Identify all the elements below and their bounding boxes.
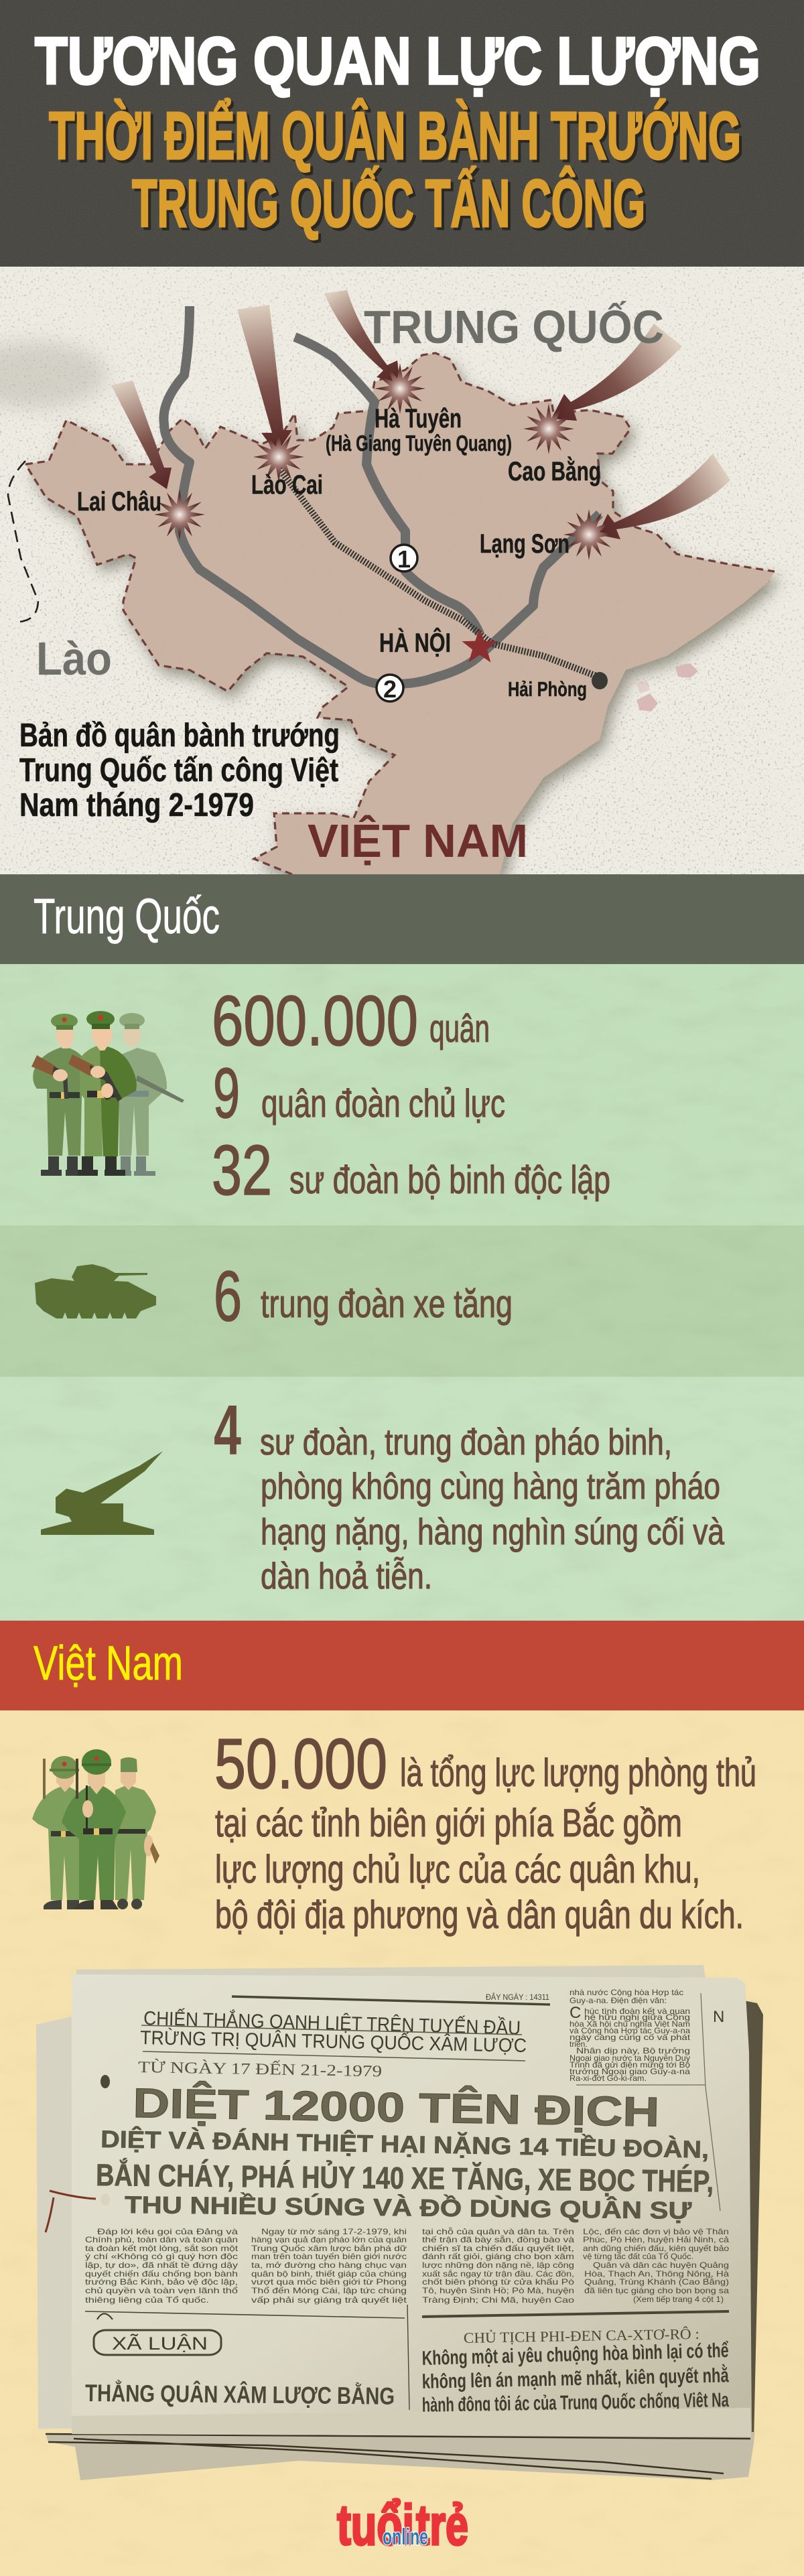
stat: 32 divisions: 32 — [212, 1131, 272, 1210]
newspaper: article column 2: ta, mở đường cho hàng chục vạn — [251, 2260, 407, 2270]
newspaper: back sheets — [36, 1965, 763, 2480]
icon: tank — [35, 1264, 156, 1319]
map label: TRUNG QUOC: TRUNG QUỐC — [364, 300, 664, 353]
map label: Lao Cai: Lào Cai — [251, 470, 323, 500]
stat: 600.000 troops: 600.000 — [212, 981, 418, 1061]
newspaper: article column 1: chủ quyền và toàn vẹn lãnh thổ — [85, 2286, 238, 2295]
stat: 9 corps — [213, 1054, 505, 1133]
icon: burst Cao Bang — [523, 403, 574, 454]
newspaper: article column 1: thiêng liêng của Tổ quốc. — [85, 2295, 209, 2305]
header panel — [0, 0, 804, 267]
map: western border dashed — [25, 464, 395, 874]
newspaper: side column box: ngày càng củng cố và phát — [570, 2033, 691, 2042]
newspaper: side column box — [570, 1988, 691, 2083]
newspaper: article column 4: Lộc, đến các đơn vị bảo vệ Thân — [583, 2227, 729, 2236]
map: attack arrow Lai Chau — [111, 381, 172, 489]
newspaper: article column 2: man trên toàn tuyến biên giới nước — [251, 2252, 407, 2261]
newspaper: article column 3: chốt biên phòng từ cửa khẩu Pò — [422, 2277, 574, 2287]
icon: burst Lai Chau — [154, 489, 205, 540]
map: islands — [636, 663, 698, 711]
newspaper: article column 3 — [422, 2226, 574, 2305]
panel: China troops — [0, 964, 804, 1225]
stat: 4 artillery divisions: dàn hoả tiễn. — [261, 1555, 432, 1597]
map label: Ha Tuyen: Hà Tuyên — [375, 404, 462, 433]
stat: 4 artillery divisions: 4 — [214, 1391, 241, 1470]
newspaper: article column 3: xuất sắc ngay từ trận đầu. Các đồn, — [422, 2268, 574, 2279]
map caption: Nam tháng 2-1979 — [19, 787, 254, 823]
stat: 50.000 defenders: tại các tỉnh biên giới phía Bắc gồm — [215, 1802, 682, 1845]
map caption: Trung Quốc tấn công Việt — [19, 752, 338, 789]
newspaper: article column 1: trướng Bắc Kinh, bảo vệ độc lập, — [85, 2277, 238, 2287]
newspaper: article column 4 — [583, 2227, 729, 2304]
newspaper: drop cap column: N — [713, 2008, 724, 2026]
newspaper: date line: TỪ NGÀY 17 ĐẾN 21-2-1979 — [138, 2058, 382, 2080]
newspaper: article column 1: lập, tự do», đã nhất tề đứng dậy — [85, 2260, 238, 2270]
newspaper: side column box: hòa Xã hội chủ nghĩa Việt Nam — [570, 2019, 690, 2029]
stat: 4 artillery divisions — [214, 1391, 724, 1597]
newspaper: front sheet — [72, 1974, 752, 2437]
newspaper: article column 3: Tô, huyện Sình Hồ; Pò Mà, huyện — [422, 2286, 574, 2295]
newspaper: article column 2: quân bộ binh, thiết giáp của chúng — [251, 2269, 407, 2279]
newspaper: article column 2: Trung Quốc xâm lược bắn phá dữ — [251, 2243, 407, 2253]
newspaper: horizontal rules and divider — [85, 2305, 729, 2410]
newspaper: article column 4: Quảng, Trùng Khánh (Cao Bằng) — [584, 2277, 729, 2287]
map: northern border dashed — [25, 353, 775, 571]
icon: Hanoi star — [462, 628, 498, 663]
centre soldier — [62, 1749, 126, 1909]
section band: Viet Nam — [0, 1621, 804, 1710]
newspaper: subhead 1: DIỆT VÀ ĐÁNH THIỆT HẠI NẶNG 14 TIỀU ĐOÀN, — [100, 2124, 709, 2163]
newspaper: editorial headline: THẲNG QUÂN XÂM LƯỢC BẰNG — [85, 2378, 395, 2410]
logo: Tuoi Tre Online: tuổi — [337, 2494, 414, 2557]
map label: Cao Bang: Cao Bằng — [508, 456, 601, 486]
newspaper: article column 4: (Xem tiếp trang 4 cột 1) — [633, 2295, 724, 2304]
newspaper: article column 3: tại chỗ của quân và dân ta. Trên — [422, 2226, 574, 2236]
newspaper: subhead 3: THU NHIỀU SÚNG VÀ ĐỒ DÙNG QUÂN SỰ — [125, 2190, 691, 2224]
map: attack arrow Cao Bang — [551, 324, 682, 421]
stat: 600.000 troops: quân — [429, 1007, 490, 1050]
icon: rocket launcher — [41, 1451, 163, 1535]
icon: burst Lao Cai — [253, 431, 304, 482]
newspaper: article column 4: đã liên tục giáng cho bọn bọng sa — [584, 2286, 729, 2295]
newspaper: side column box: Nhân dịp này, Bộ trưởng — [576, 2046, 690, 2055]
newspaper: column rules — [576, 1993, 720, 2211]
section band: Trung Quoc: Trung Quốc — [34, 888, 220, 944]
map: land mass of Vietnam — [25, 353, 775, 874]
newspaper: side column box: C — [570, 2004, 581, 2022]
newspaper: article column 3: đánh rất giỏi, giáng cho bọn xâm — [422, 2252, 574, 2261]
newspaper: side column box: nhà nước Cộng hòa Hợp tác — [570, 1988, 683, 1997]
newspaper: article column 1: quyết chiến đấu chống bọn bành — [85, 2269, 238, 2279]
centre soldier — [68, 1011, 137, 1176]
left soldier — [32, 1756, 83, 1909]
icon: Vietnamese soldiers — [32, 1749, 159, 1909]
map caption: Bản đồ quân bành trướng — [19, 718, 340, 754]
section band: Trung Quoc — [0, 874, 804, 964]
newspaper: article column 1: Đáp lời kêu gọi của Đảng và — [97, 2227, 238, 2236]
map: attack arrow Lao Cai — [237, 305, 292, 454]
map: attack arrow Lang Son — [598, 454, 730, 539]
newspaper: article column 1: ta đoàn kết một lòng, sắt son một — [85, 2243, 239, 2253]
newspaper: article column 3: thế trận đã bày sẵn, đồng bào và — [422, 2234, 574, 2244]
stat: 50.000 defenders: 50.000 — [214, 1724, 387, 1804]
newspaper: bottom torn strip — [72, 2408, 751, 2437]
newspaper: article column 4: vệ từng tấc đất của Tổ Quốc. — [583, 2252, 693, 2261]
newspaper: article column 2: vượt qua mốc biên giới từ Phong — [251, 2277, 407, 2287]
newspaper: article column 1: ý chí «Không có gì quý hơn độc — [85, 2252, 238, 2261]
left soldier — [31, 1014, 86, 1176]
map: invasion route 1 road — [295, 337, 480, 634]
section band: Viet Nam: Việt Nam — [34, 1637, 183, 1690]
newspaper: dateline: ĐÂY NGÀY : 14311 — [486, 1992, 549, 2002]
icon: burst Lang Son — [563, 509, 614, 560]
map label: Lao: Lào — [36, 632, 112, 685]
newspaper: article column 3: lược những đòn nặng nề, lập công — [422, 2260, 574, 2270]
newspaper: side column box: trưởng Ngoại giao Guy-a-na — [570, 2067, 690, 2076]
newspaper: article column 2: Ngay từ mờ sáng 17-2-1979, khi — [261, 2227, 407, 2236]
map label: Ha Noi: HÀ NỘI — [379, 627, 451, 658]
newspaper: side column box: Trinh đã gửi điện mừng tới Bộ — [570, 2060, 690, 2070]
stat: 6 tank regiments: 6 — [214, 1257, 242, 1336]
newspaper: article column 2 — [251, 2227, 407, 2305]
map: attack arrow Ha Tuyen — [324, 290, 400, 383]
newspaper: punch holes — [97, 2075, 113, 2319]
newspaper: article column 2: hàng vạn quả đạn pháo lớn của quân — [251, 2235, 407, 2244]
newspaper: article column 3: Tràng Định; Chi Mã, huyện Cao — [422, 2295, 574, 2305]
panel: China tanks — [0, 1225, 804, 1377]
newspaper: side column box: Guy-a-na. Điện điện văn: — [570, 1996, 667, 2005]
panel: Viet Nam forces — [32, 1738, 763, 2547]
logo: Tuoi Tre Online: online — [383, 2524, 428, 2550]
map: invasion route 2 road — [163, 306, 600, 685]
newspaper: side column box: và Cộng hòa Hợp tác Guy-a-na — [570, 2026, 690, 2035]
icon: Hai Phong dot — [592, 672, 608, 689]
newspaper: article column 2: vấp phải sự giáng trả quyết liệt — [251, 2295, 407, 2305]
icon: route marker 1: 1 — [397, 545, 411, 573]
newspaper: side column box: hệ hữu nghị giữa Cộng — [584, 2013, 690, 2022]
newspaper: article column 2: Thổ đến Móng Cái, lập tức chúng — [251, 2286, 407, 2295]
newspaper: article column 3: chiến sĩ ta chiến đấu quyết liệt, — [422, 2244, 574, 2253]
newspaper: quotation block: CHỦ TỊCH PHI-ĐEN CA-XTƠ-RÔ : — [464, 2325, 699, 2346]
newspaper: rules — [141, 2025, 525, 2061]
newspaper: side column box: Ra-xi-đớt Gô-ki-ram. — [570, 2074, 647, 2083]
stat: 6 tank regiments — [214, 1257, 513, 1336]
newspaper: kicker line 2: TRỪNG TRỊ QUÂN TRUNG QUỐC XÂM LƯỢC — [140, 2026, 527, 2057]
newspaper: kicker line 1: CHIẾN THẮNG OANH LIỆT TRÊN TUYẾN ĐẦU — [143, 2007, 521, 2039]
map: railway hatched line — [279, 469, 600, 677]
right soldier — [118, 1013, 184, 1176]
logo: Tuoi Tre Online: trẻ — [416, 2494, 468, 2557]
stat: 6 tank regiments: trung đoàn xe tăng — [261, 1282, 513, 1326]
newspaper stack — [36, 1965, 763, 2480]
icon: route marker 2: 2 — [383, 675, 397, 703]
stat: 32 divisions: sư đoàn bộ binh độc lập — [289, 1158, 610, 1202]
newspaper: article column 4: Phúc, Pò Hèn, huyện Hải Ninh, cả — [583, 2235, 729, 2244]
newspaper: top rule — [232, 1996, 550, 2005]
map caption — [19, 718, 340, 823]
panel: invasion map — [0, 267, 804, 874]
map label: VIET NAM: VIỆT NAM — [308, 814, 528, 867]
newspaper: main headline: DIỆT 12000 TÊN ĐỊCH — [133, 2080, 660, 2136]
panel: China artillery — [0, 1377, 804, 1621]
newspaper: side column box: húc tình đoàn kết và quan — [584, 2007, 690, 2016]
map label: Lai Chau: Lai Châu — [77, 487, 161, 517]
newspaper: side column box: Ngoại giao nước ta Nguyễn Duy — [570, 2053, 690, 2063]
map: Laos border dashed — [8, 461, 38, 622]
newspaper: article column 4: Hòa, Thạch An, Thông Nông, Hà — [584, 2269, 729, 2279]
icon: Chinese soldiers — [31, 1011, 184, 1176]
newspaper: editorial tag: XÃ LUẬN — [112, 2333, 208, 2354]
newspaper: article column 1: Chính phủ, toàn dân và toàn quân — [85, 2235, 238, 2244]
right soldier — [115, 1757, 159, 1909]
newspaper: article column 1 — [85, 2227, 239, 2305]
newspaper: article column 4: anh dũng chiến đấu, kiên quyết bảo — [583, 2244, 729, 2253]
stat: 9 corps: 9 — [213, 1054, 240, 1133]
newspaper: side column box: triển. — [570, 2039, 588, 2049]
stat: 4 artillery divisions: sư đoàn, trung đoàn pháo binh, — [260, 1421, 672, 1463]
stat: 32 divisions — [212, 1131, 610, 1210]
icon: burst Ha Tuyen — [375, 363, 425, 414]
map label: Ha Giang Tuyen Quang: (Hà Giang Tuyên Quang) — [326, 431, 512, 456]
newspaper: red binding thread — [46, 2191, 96, 2232]
stat: 9 corps: quân đoàn chủ lực — [261, 1082, 505, 1126]
newspaper: quotation block — [421, 2325, 729, 2417]
stat: 50.000 defenders — [214, 1724, 756, 1937]
icon: route marker 1 — [391, 545, 417, 573]
map label: Hai Phong: Hải Phòng — [508, 677, 587, 701]
newspaper: editorial tag — [94, 2330, 221, 2355]
icon: route marker 2 — [377, 675, 403, 703]
map label: Lang Son: Lạng Sơn — [480, 529, 570, 559]
newspaper: article column 4: Quân và dân các huyện Quảng — [593, 2260, 729, 2270]
